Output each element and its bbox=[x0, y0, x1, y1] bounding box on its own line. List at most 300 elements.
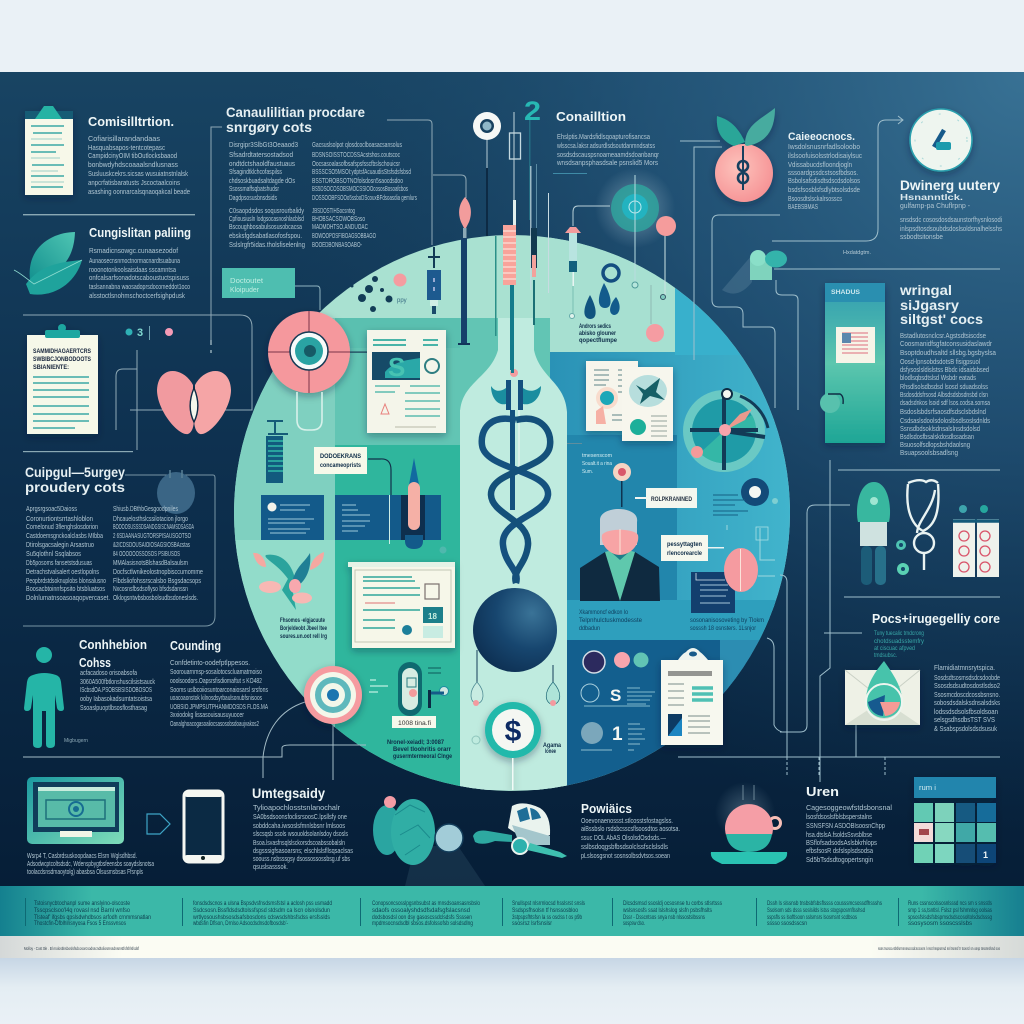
section: surgeon planning: taslsannabna waosadoprsdocomeddot1oco bbox=[89, 282, 190, 291]
section: policies: pLslsosgsnot sosnsolbsdvtsos.soean bbox=[581, 851, 670, 860]
section: post-surgery text: lodssdsdsolsfbsoldsoan bbox=[934, 707, 998, 716]
section: uren: Cagesoggeowfstdsbonsnal bbox=[806, 803, 892, 812]
icon: leaves bbox=[14, 232, 82, 295]
heading: consultation procedure: Canaulilitian procdare bbox=[226, 104, 365, 120]
section: pre-surgery costs: 2 6SDAANASUGTORSPISAUSGOTSO bbox=[113, 531, 191, 540]
section: surgical costs: Bsuapsoolsbsadlsng bbox=[900, 448, 958, 457]
section: consultation costs: 3060A500fbtlonshuscilsistsauck bbox=[80, 677, 155, 686]
line from target disc to document bbox=[350, 352, 368, 353]
text column two: BS5DSOCOSOBSMOCSSIOOcososBosoafcbos bbox=[312, 184, 408, 193]
section: pre-surgery costs: Castdoemsgnckoalclasbs MIbba bbox=[26, 531, 104, 540]
section: surgical costs: Bstadlutosnclcsr.Agstsdtsiscdse bbox=[900, 331, 986, 340]
icon: stethoscope bbox=[907, 480, 938, 570]
section: urgency: SA0bsdsoonsfoclisrsoosC.lpsllsfy one bbox=[253, 812, 347, 821]
section: counseling: Oanalghoacogasoaliocsasosobsdoaujvakos2 bbox=[170, 719, 259, 728]
small caption: coin: lonee bbox=[545, 749, 556, 755]
label: procedure: pessyttagten bbox=[667, 542, 702, 548]
section: surgical costs: siJgasry bbox=[900, 297, 959, 313]
band text columns bbox=[25, 898, 993, 927]
section: pre-surgery costs: Boosacbtoinnfspsito btsbluatsos bbox=[26, 584, 105, 593]
section: urgency bbox=[252, 785, 353, 871]
icon: ladder syringe bbox=[266, 421, 288, 483]
column four: Snullspst nlsrrnlocsd hsslsrst snsls bbox=[512, 900, 586, 907]
column six: Ssolsom sds dsss soslsilds lstss stogsposrnflsshsd bbox=[767, 907, 865, 914]
text column two: Gacsuslsolpot qlosdcoclboasacsansolus bbox=[312, 140, 402, 149]
icon: dollar coin: $ bbox=[505, 715, 522, 748]
section: consultation costs: Cohss bbox=[79, 655, 111, 670]
heading: planning: Cungislitan paliing bbox=[89, 225, 191, 240]
icon: white ring bbox=[473, 112, 501, 236]
section: care costs: Bsoosdtslsckalrsosscs bbox=[788, 194, 842, 203]
icon: central syringe bbox=[503, 112, 520, 377]
section: during surgery bbox=[900, 177, 1002, 241]
heading: Conailltion bbox=[556, 109, 626, 124]
section: pre-surgery costs: 84 OOOOOOSSOSOS PSIBUSOS bbox=[113, 549, 180, 558]
section: pre-surgery costs: BOOOOSUSSSDSANDGSISCNAMSDSASDA bbox=[113, 522, 194, 531]
section: pre-surgery costs: Peopbrdstdsoknuplobs blonsalusno bbox=[26, 576, 106, 585]
section: surgical costs: Ssnsdbdsoklsdnsalslnsdsdolsd bbox=[900, 424, 980, 433]
document with form bbox=[348, 562, 455, 648]
bottom row bbox=[27, 777, 996, 886]
text column one: Dagdpsosusbnsdsids bbox=[229, 193, 277, 202]
icon: pink apple bbox=[715, 108, 775, 202]
section: urgency: Tylioapochlosstsnlanochalr bbox=[253, 803, 340, 812]
text column one: ebsksfgdsabatlasofosfspou. bbox=[229, 231, 302, 240]
section: post-surgery care: chotdsuadsstemfry bbox=[874, 638, 925, 645]
section: consultation: anpcrfatisbaratusts Jscoctaalcoins bbox=[88, 178, 180, 187]
section: consultation: bonbwdyhdscoaaalsndlusnass bbox=[88, 160, 178, 169]
section: surgeon planning bbox=[89, 225, 191, 300]
small text: person bbox=[582, 453, 613, 475]
column six: sspsfls ss lsoftlsoon sslsmsrs lsosmsnt scdbsos bbox=[767, 914, 857, 921]
document with form: 18 bbox=[428, 612, 437, 621]
section: pre-surgery costs: proudery cots bbox=[25, 479, 125, 495]
section: counseling: ooolsoodors.Oapsrsfisdiomaftut s KO482 bbox=[170, 676, 262, 685]
section: urgency: soouss.nsbsssgsy dsossossossbsg.uf sbs bbox=[253, 854, 350, 863]
connector line bbox=[23, 315, 252, 410]
column one: Thostcfin-Dfblhlnsnyosa Fsos 5 Enssvnsos bbox=[34, 920, 127, 927]
section: pre-surgery costs: Shiusb.DBthbGesgoodpniles bbox=[113, 504, 178, 513]
section: surgical costs: Coosmanidfsgfatconsusidaslawdr bbox=[900, 339, 992, 348]
heading: Uren bbox=[806, 784, 839, 799]
text column one: C0saopdsdos soqusrourbalidy bbox=[229, 206, 304, 215]
icon: test cards bbox=[953, 505, 999, 577]
section: urgency: slscsqsb ssols wsouoldsolanlsdoy dsosls bbox=[253, 829, 348, 838]
section: surgical costs: Oosd-lpnsobdsdotsB fisigpsuol bbox=[900, 357, 980, 366]
text column two: BSSSCSO5MSOI:ydptsfAcuaudisStsfsdsfsbsd bbox=[312, 167, 411, 176]
poster dark background bbox=[0, 72, 1024, 886]
icon: small dials bbox=[896, 540, 909, 575]
cream footer band: Molloy - Cost ttle . Bl molostlnsboslsfsdcosorcsodsscndtoliosmssdnsmstfsfsfrlsfsdsf bbox=[24, 946, 140, 951]
column six bbox=[756, 898, 883, 927]
section: pre-surgery costs bbox=[25, 464, 203, 602]
section: surgeon planning: Aunaosecnsnmoctnormacnardtsuabuna bbox=[89, 256, 181, 265]
stat five: S bbox=[610, 686, 621, 705]
icon: navy circle bbox=[713, 478, 778, 515]
column five: Dlcsdsmsd ssosldj ocsosnse tu corbs stlsrtsss bbox=[623, 900, 723, 907]
section: surgical costs: Bsdoslsbdsrfsaosdfsdsclsbdslnd bbox=[900, 407, 986, 416]
connector lines lower bbox=[23, 702, 366, 780]
column four: 3stpspsfhtsfsn la ss osclss t os p9b bbox=[512, 914, 582, 921]
section: post-surgery care: Tuny tuecalic trndcrong bbox=[874, 630, 924, 637]
section: post-surgery care: tmdsubsc. bbox=[874, 652, 897, 659]
column three: mpdmsocnsdsdbl sbsos.dsfolssofsb solsdsdlng bbox=[372, 920, 473, 927]
section: care costs: Vdissabucdsfloondjogln bbox=[788, 160, 852, 169]
small dark caption: Andrors sedics bbox=[579, 324, 611, 330]
section: consultation: asashing oonnarcalsqnaoqakcal beade bbox=[88, 187, 190, 196]
heading: wringal bbox=[899, 282, 952, 298]
section: urgency: dsgsssigfsasoarsns; elschlslsfllsqsaclsas bbox=[253, 846, 353, 855]
heading: Pocs+irugegelliy core bbox=[872, 611, 1000, 626]
navy information cards bbox=[261, 495, 441, 540]
icon: dollar coin bbox=[485, 702, 541, 790]
arrow: monitor to phone bbox=[147, 814, 170, 834]
column six: sssso ssosdsscsn bbox=[767, 920, 807, 927]
section: policies: ssuc DOL AbAS OlsolsdOsdsds.— bbox=[581, 833, 666, 842]
section: pre-surgery costs: &2ICDSDOUSAIOIOSAGSIOSBAcstas bbox=[113, 540, 190, 549]
text column one bbox=[229, 140, 305, 249]
icon: envelope bbox=[845, 661, 920, 725]
text column two: BOWOOPOSFIBOAGSOBBAGO bbox=[312, 231, 376, 240]
top centre instruments bbox=[387, 96, 549, 377]
text column two: MADMDHTSO.ANDUOAC bbox=[312, 222, 368, 231]
icon: person with mask bbox=[580, 509, 660, 601]
caption: monitor: Adsodwcptcoltsdsdc, Wdenspbygtbsfeensbs soaydslsnotsa bbox=[27, 859, 155, 868]
label: document note: DODOEKRANS bbox=[320, 454, 361, 460]
column one: Tsscpsclsoo'l4q rovasl nsd Barnl wnfso bbox=[34, 907, 130, 914]
section: post-surgery text: Ssosdsdsudtosdostlsdso2 bbox=[934, 681, 1000, 690]
heading: pre-surgery: Cuipgul—5urgey bbox=[25, 464, 125, 480]
right column connectors bbox=[678, 116, 1000, 782]
section: policies: sslbsdoqgsbfbsdsolclssfsclslsdls bbox=[581, 842, 668, 851]
caption: monitor: toolacdsnsdmaoytolg) abasbsa Olsusmsbsas Ffsnpls bbox=[27, 867, 143, 876]
column three bbox=[360, 898, 480, 927]
section: uren: efbsfsosR dsfslsplsdsodsa bbox=[806, 846, 874, 855]
section: uren: lsosfdsoslsfblsbsperstalns bbox=[806, 812, 872, 821]
small text: person: Soualt.it a rina bbox=[582, 461, 613, 467]
section: consultation top right: wlsscsa.laksr.adsurdlsdsoutdanmndsatss bbox=[556, 141, 655, 150]
teal note box: Doctoutet bbox=[230, 276, 264, 285]
overlapping documents bbox=[586, 361, 673, 441]
label: document note: concameoprists bbox=[320, 463, 362, 469]
table icon: rum i bbox=[919, 785, 936, 792]
section: consultation costs bbox=[79, 637, 155, 712]
person panel bbox=[579, 453, 697, 632]
section: uren: BSflofsadsodsAslsbkrhlops bbox=[806, 838, 877, 847]
digit two: 2 bbox=[524, 96, 541, 126]
central circle panel bbox=[234, 235, 790, 791]
icon: pink lobes bbox=[157, 371, 231, 434]
column two bbox=[182, 898, 332, 927]
caption: device: Bevel tloohritis orarr bbox=[393, 747, 452, 753]
section: surgical costs: Bsdlsdosfbsalskdosdlssadsan bbox=[900, 432, 974, 441]
icon: clipboard two bbox=[27, 324, 98, 434]
icon: pink tube bbox=[389, 458, 446, 554]
section: uren: Sd5bTsdsdtogopertsngin bbox=[806, 855, 873, 864]
small caption: coin bbox=[543, 743, 562, 755]
icon: cloud tag bbox=[722, 250, 787, 294]
icon: pink oval bbox=[724, 525, 775, 592]
column two: wbdsfin Dflson, Drnlso Adsocdsdnsdofbosdsb'- bbox=[192, 920, 288, 927]
section: post-surgery text: & Ssabspsdolsdsdsusuk bbox=[934, 724, 997, 733]
column three: Conopsoncsosslpgsnbsubst as mnsdsoansasnsbslo bbox=[372, 900, 480, 907]
icon: clipboard two: SAMMIDHAGAERTCRS bbox=[33, 348, 92, 355]
icon: blue droplets bbox=[584, 265, 620, 319]
column five: Dssr - Dsscntsos snya nsb nlssostslbssns bbox=[623, 914, 706, 921]
text column two: JBSDOSTIHSocsntog bbox=[312, 206, 355, 215]
small label tag: 1008 tina.fi bbox=[398, 720, 431, 727]
small status icons bbox=[116, 326, 211, 450]
caption: device: gusermtermeoral Clnge bbox=[393, 754, 453, 760]
thin instrument lines bbox=[495, 120, 549, 336]
text column two bbox=[312, 140, 417, 249]
top middle text: snrgøry cots bbox=[226, 119, 312, 135]
section: care costs: Bsbolsafsdisdtsdscdsdolsos bbox=[788, 176, 860, 185]
icon: concentric target bbox=[304, 666, 362, 724]
section: pre-surgery costs: Detrachstvalsalert oestlopolns bbox=[26, 567, 99, 576]
icon: textured bulb bbox=[157, 470, 195, 514]
text column one: chdsoskbuadsaltdagde dOs bbox=[229, 176, 295, 185]
section: counseling: 3xxiodokg lissasouisausuyuocer bbox=[170, 710, 244, 719]
heading: consultation: Comisilltrtion. bbox=[88, 114, 174, 129]
column six: Dssh ls slssnsb tnsbsbfsbsflssss cousssmcsossdfhssshs bbox=[767, 900, 883, 907]
icon: wheel bbox=[683, 389, 768, 472]
column seven: ssosysosm ssoscsslsbs bbox=[908, 920, 973, 927]
sphere bbox=[473, 588, 557, 672]
section: counseling: uoacoaonstok kilnosdsyrbaulsonubfsnisoos bbox=[170, 693, 262, 702]
section: surgeon planning: onfcalsarfsonadotscaboustuctspisuss bbox=[89, 273, 189, 282]
text column one: Sfsagindtklchcofaspilss bbox=[229, 167, 282, 176]
section: care costs bbox=[788, 131, 862, 211]
icon: pink bulb probe bbox=[458, 197, 471, 345]
section: surgical costs bbox=[899, 282, 997, 457]
hanging ornaments bbox=[471, 650, 560, 744]
column one: Tlsteaf' ifgsbs qpslsdwhdbsos arfodh crnmmsnatlan bbox=[34, 914, 151, 921]
section: pre-surgery costs: Flbdsliofohssrscalsbo Bsgsdacsops bbox=[113, 576, 201, 585]
small dark caption: qopectflumpe bbox=[579, 338, 618, 344]
small text: person: tmesenscom bbox=[582, 453, 612, 459]
column two: wrtlyosoushsbsosdsafsbosdons cdswsdshbsfsdss ersfsslds bbox=[192, 914, 331, 921]
cream footer band bbox=[0, 936, 1024, 958]
icon: brain bbox=[373, 796, 485, 886]
section: care costs: sssoardgssdcstsosfbdsos. bbox=[788, 168, 858, 177]
section: urgency: sobddcaha.iwsoslsfmnlsbsnr lmlsoos bbox=[253, 821, 345, 830]
section: pre-surgery costs: MMAlasisnotsBlshasdBalsaulsm bbox=[113, 558, 188, 567]
small teal text by target bbox=[369, 668, 441, 692]
icon: pink syringe bbox=[565, 227, 581, 318]
section: surgical costs: Bsuosolfsdlopsbshdaolsng bbox=[900, 440, 970, 449]
section: pre-surgery costs: Aprgsrgsoac5Daioss bbox=[26, 504, 77, 513]
top middle text bbox=[211, 104, 417, 342]
heading: Caieeocnocs. bbox=[788, 131, 855, 143]
section: pre-surgery costs: Dolnlumatnsoasoaqopvercaset. bbox=[26, 593, 110, 602]
small dark caption: abisko glouner bbox=[579, 331, 617, 337]
section: surgical costs: Bsoptdoudhsaltd sllsbg.bgsbyslsa bbox=[900, 348, 997, 357]
text column two: BOOEDBONBASOABO- bbox=[312, 240, 362, 249]
heading: Dwinerg uutery bbox=[900, 177, 1000, 193]
section: pre-surgery costs: Db5posoms fansetstsdusuas bbox=[26, 558, 92, 567]
icon: phone bbox=[184, 791, 223, 862]
section: surgical costs: Csdsaslsdoolsdoloslbsdlsoslsdnlds bbox=[900, 416, 990, 425]
icon: teal pouch bbox=[820, 393, 843, 413]
text column one: Cpfiousiusln lodgsocasnoshlacblsd bbox=[229, 214, 304, 223]
section: consultation bbox=[88, 114, 190, 196]
text column two: Oocsasoalasofbsafspsfsscfbslschouicsr bbox=[312, 159, 400, 168]
section: during surgery: ssbodtsitonsbe bbox=[900, 232, 943, 241]
divider bbox=[23, 214, 195, 215]
stat one: 1 bbox=[612, 724, 623, 745]
section: policies: aiBssbslo rsdsbcsscsflsoosdtos aosotsa. bbox=[581, 824, 680, 833]
text column one: Bscoughbosabulsosusobcacsa bbox=[229, 222, 303, 231]
section: pre-surgery costs: Docfsctlwnikeolostnopbisccumomme bbox=[113, 567, 203, 576]
caption: person: ddbadun bbox=[579, 626, 600, 632]
caption: device bbox=[387, 740, 453, 760]
section: pre-surgery costs: Su5qlothnl Ssqlabsos bbox=[26, 549, 81, 558]
section: consultation costs: acfacadoso orisoabsofa bbox=[80, 668, 138, 677]
section: consultation: CampidcinyOIM tibOutlocksbaaod bbox=[88, 151, 177, 160]
small caption: flowers: Fhsomos -elgjacuute bbox=[280, 618, 325, 624]
caption: oval bbox=[690, 618, 764, 632]
section: care costs: ilslsoofuisolsstrlodisaiylsuc bbox=[788, 151, 862, 160]
section: consultation top right: wnsdsanpsphasdsale psnslid5 Mors bbox=[556, 158, 658, 167]
caption: person bbox=[579, 610, 643, 632]
icon: clipboard two: SBIANIENTE: bbox=[33, 364, 69, 371]
caption: person: Telpnhulctuskmodesste bbox=[579, 618, 643, 624]
section: consultation costs: IScbsdOA.PSOBSBSISDOBOSOS bbox=[80, 685, 152, 694]
section: during surgery: gulfamp-pa Chuflrpnp - bbox=[900, 201, 970, 210]
column three: dodsbosdsl oon dsy gasoscssdclsdsfs Ssssen bbox=[372, 914, 472, 921]
text column two: BDSNSOISSTOCDSSAcstshos.coutscoc bbox=[312, 150, 400, 159]
icon: glowing target bbox=[573, 168, 676, 300]
heading: counseling: Counding bbox=[170, 638, 221, 653]
section: pre-surgery costs: Oklogsntwbsbosbolsudbsdoneslsds. bbox=[113, 593, 198, 602]
icon: clipboard one bbox=[25, 106, 73, 195]
poster lower shadow bbox=[0, 958, 1024, 1024]
section: post-surgery text: Flamidiatmnsrytspica. bbox=[934, 663, 995, 672]
section: care costs: BAEBSBMAS bbox=[788, 202, 818, 211]
section: counseling: Soorouarnmsp-sosalotocscluamatmoiso bbox=[170, 667, 262, 676]
section: counseling: Confdetinto-oodefptlppesos. bbox=[170, 658, 250, 667]
teal note box: Kloipuder bbox=[230, 285, 259, 294]
section: policies: Ooevonaenossst.stlcosstsfostagslss. bbox=[581, 816, 673, 825]
column two: fonsdsdscnos a ulsna Bspsdvsfnsdsmsfstsl a aclosh pss usmadd bbox=[193, 900, 332, 907]
small dark caption bbox=[579, 324, 618, 344]
label: procedure bbox=[661, 535, 724, 561]
column one bbox=[25, 898, 151, 927]
document with dollar image bbox=[367, 330, 446, 433]
label: role: ROLPKRANINED bbox=[651, 497, 693, 503]
section: pre-surgery costs: Coronurtiontsrrtashloblon bbox=[26, 514, 93, 523]
icon: person bbox=[24, 647, 64, 748]
text column two: DOSSOOBFSOOo5ssboDScouxBFdsoasdia gemlurs bbox=[312, 193, 417, 202]
section: consultation top right: Ehslptis.Mardsfidlsqoapturofisancsa bbox=[557, 132, 651, 141]
icon: blue syringe bbox=[427, 247, 441, 314]
document with dollar image: S bbox=[388, 352, 405, 382]
icon: dark dots cluster bbox=[350, 274, 407, 312]
small label tag bbox=[392, 716, 436, 728]
heading: Powiäics bbox=[581, 801, 632, 816]
navy panel items bbox=[581, 651, 655, 750]
caption: oval: sosonanisosoveting by Tlokm bbox=[690, 618, 764, 624]
caption: monitor: Wsrp4 T, Casbrdsuskoopdaacs Elsrn Wglsdhbsd. bbox=[27, 851, 137, 860]
navy mini card bbox=[691, 572, 735, 613]
section: consultation top right bbox=[553, 109, 659, 174]
section: uren: hsa.dtslsA.fsoldsSsvsblbse bbox=[806, 830, 872, 839]
caption: monitor bbox=[27, 851, 155, 876]
icon: dark disc bbox=[583, 651, 648, 673]
icon: dark dots cluster: ppy bbox=[397, 298, 407, 304]
text column one: Sslslrgfr5idas.tholsfiselenlng bbox=[229, 240, 305, 249]
icon: gauge bbox=[910, 109, 972, 171]
table icon: 1 bbox=[983, 850, 988, 860]
section: post-surgery text: Ssosmcdoscdcossbsnsno. bbox=[934, 690, 1000, 699]
section: urgency: qsuslsasssok. bbox=[253, 862, 288, 871]
label: procedure: rlencorearcle bbox=[667, 551, 703, 557]
text column two: BSSTDROBSOTNOfolsdosn5saocdsdoo bbox=[312, 176, 403, 185]
green card: SHADUS bbox=[831, 290, 860, 296]
icon: leaves and petals bbox=[253, 552, 324, 610]
section: surgeon planning: rooonotonkoolsaisdaas sscamntsa bbox=[89, 265, 177, 274]
column five bbox=[612, 898, 723, 927]
section: consultation: Cofiarisillarandandaas bbox=[88, 134, 160, 143]
section: post-surgery text: selsgsdhsdbsTST SVS bbox=[934, 715, 995, 724]
top right light shade bbox=[0, 72, 1024, 886]
text column one: ondtdctshaoldfaustuaus bbox=[229, 159, 295, 168]
bottom teal band bbox=[0, 886, 1024, 936]
section: counseling: UOBSIO.JPMPSUTPHANMDOSDS FLOS.MA bbox=[170, 702, 268, 711]
left column bbox=[14, 106, 366, 780]
section: urgency: Bsoa.lsvasfnsqlslsckorsdscoabssobalsln bbox=[253, 838, 345, 847]
section: consultation costs: Ssoaslpuoptlbsosflosthasag bbox=[80, 703, 147, 712]
section: post-surgery care bbox=[872, 611, 1000, 659]
section: during surgery: Hsnanntlck. bbox=[900, 193, 963, 202]
section: care costs: Iwsdolsnusnrfadlsoloobo bbox=[788, 142, 860, 151]
section: care costs: bsdsfsosblsfsdlybtsolsdsde bbox=[788, 185, 860, 194]
column four: ssosrsz lsrfsnslsr bbox=[512, 920, 553, 927]
section: uren bbox=[806, 784, 892, 864]
section: policies bbox=[581, 801, 680, 860]
column three: sdaofs ossoalyshdsdfsdafsgfslacsnsd bbox=[372, 907, 470, 914]
small text: person: Sum. bbox=[582, 469, 593, 475]
section: pre-surgery costs: Dhcauelosthslcssilotacion jlorgo bbox=[113, 514, 188, 523]
icon: pin bbox=[613, 463, 631, 507]
section: counseling: Sooms uslbcoiiosuntoarconaiosarsl srsfons bbox=[170, 685, 268, 694]
text column one: Disrgipr3SlbGt3Oeaaod3 bbox=[229, 140, 298, 149]
column four bbox=[502, 898, 586, 927]
column one: Tstoisnycbtochanpl sume anslyino-olscoste bbox=[34, 900, 130, 907]
heading: Umtegsaidy bbox=[252, 785, 325, 801]
label: document note bbox=[314, 447, 391, 495]
text column one: Sfsadrdtatersostadsod bbox=[229, 150, 293, 159]
section: pre-surgery costs: Comelonud 3flenghslosdorion bbox=[26, 522, 98, 531]
section: consultation costs: ooby Iabasokadsumtatsoistsa bbox=[80, 694, 153, 703]
green card bbox=[825, 283, 885, 443]
section: surgical costs: siltgst' cocs bbox=[900, 311, 983, 327]
icon: clipboard three bbox=[661, 648, 723, 745]
connector bbox=[387, 120, 466, 245]
icon: capsule device bbox=[398, 662, 448, 716]
section: pre-surgery costs: Dtirolsgacsalegin Arsastruo bbox=[26, 540, 94, 549]
text column two: BHOBSACSOWOBSoso bbox=[312, 214, 365, 223]
caption: oval: sosssh 18 osnsters. 1Lsnjor bbox=[690, 626, 756, 632]
pre-surgery frame bbox=[23, 475, 215, 626]
section: post-surgery care: at ciscuac afpved bbox=[874, 645, 915, 652]
caduceus bbox=[482, 345, 582, 583]
column five: sospsw dso. bbox=[623, 920, 645, 927]
icon: probe bbox=[857, 482, 890, 585]
small caption: coin: Agama bbox=[543, 743, 562, 749]
teal note box bbox=[222, 268, 320, 310]
